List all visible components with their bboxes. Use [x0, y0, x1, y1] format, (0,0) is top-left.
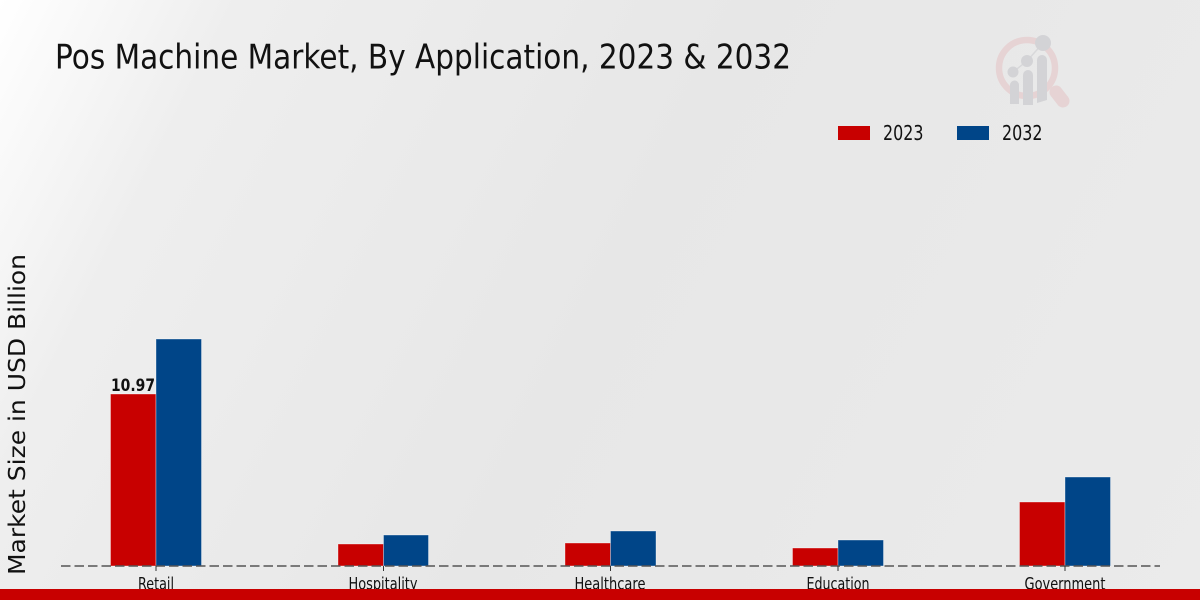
x-axis labels: Retail: [138, 574, 174, 594]
x-axis labels: Healthcare: [574, 574, 646, 594]
legend item: 2032: 2032: [1002, 121, 1042, 145]
data label: 10.97: 10.97: [111, 376, 155, 395]
x-axis baseline: [61, 565, 1160, 567]
icon: watermark logo: [999, 35, 1063, 105]
title: Pos Machine Market, By Application, 2023 & 2032: [55, 38, 791, 78]
bars: Healthcare: [565, 531, 656, 566]
legend: [838, 121, 1042, 145]
x-axis labels: Government: [1024, 574, 1106, 594]
bottom red band: [0, 589, 1200, 600]
bar chart: [61, 339, 1160, 594]
bars: Retail: [110, 339, 202, 566]
legend item: 2023: 2023: [883, 121, 924, 145]
legend item: 2023: [838, 121, 924, 145]
y-axis label: Market Size in USD Billion: [3, 254, 31, 575]
bars: Education: [792, 540, 884, 566]
x-axis labels: Hospitality: [348, 574, 418, 594]
x-axis labels: [138, 574, 1106, 594]
legend item: 2032: [957, 121, 1042, 145]
bars: Government: [1020, 477, 1110, 566]
x-axis labels: Education: [806, 574, 870, 594]
bars: Hospitality: [338, 535, 428, 566]
